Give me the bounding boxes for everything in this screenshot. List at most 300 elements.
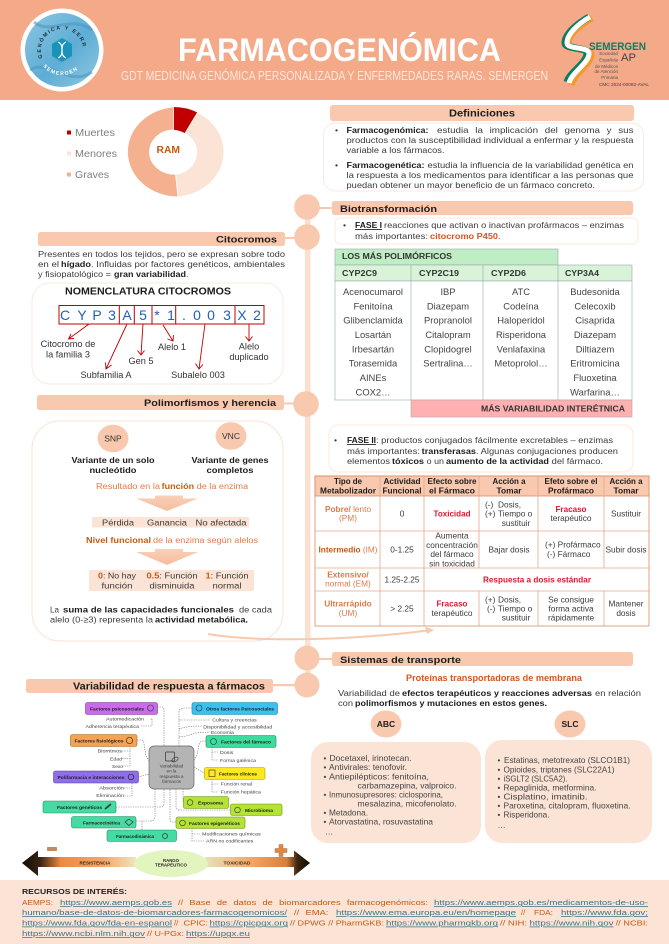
arrow: rango terapéutico: RESISTENCIA [80,860,110,866]
node: factores del fármaco [206,736,276,748]
footer: recursos de interés: https://www.ncbi.nlm.nih.gov [22,929,145,938]
footer: recursos de interés: https://www.pharmgkb.org [386,918,498,928]
panel: fase I: . [498,231,500,241]
panel: definiciones: variable a los fármacos. [346,145,444,155]
labels: otros factores: Disponibilidad y accesibilidad [203,724,273,730]
band: función: Ganancia [147,518,187,528]
table: CYP polimórficos: Metoprolol… [494,358,548,369]
node: otros factores psicosociales [192,702,278,714]
labels: psicosociales [86,717,145,729]
node: centro: respuesta a [159,774,184,779]
row: pobre [325,500,641,528]
table: CYP polimórficos: Glibenclamida [343,315,403,326]
row: pobre: sustituir [502,518,531,528]
arrow: rango terapéutico: RANGO [163,858,180,863]
row: ultrarrápido: (+) [485,594,496,604]
footer: recursos de interés: // U-PGx: [147,929,184,938]
labels: fisiológicos: Edad [110,756,122,761]
footer: recursos de interés: https://cpicpgx.org [210,918,288,928]
VNC: Variante de genes [192,455,269,465]
table head: el Fármaco [429,486,475,496]
table: CYP polimórficos: Codeína [503,300,540,311]
node: centro [149,746,194,789]
text: suma capacidades: alelo (0-≥3) representa la [50,614,153,624]
node: exposoma: Exposoma [198,800,223,806]
table: CYP polimórficos: Fenitoína [353,300,393,311]
SNP: SNP [104,434,122,444]
node: farmacodinámica: Farmacodinámica [116,834,154,839]
labels: polifarmacia [96,786,125,798]
node: factores genéticos: Factores genéticos [57,805,102,810]
panel: fase II: aumento de la actividad [446,456,549,466]
table: CYP polimórficos: AINEs [360,372,387,383]
text: suma capacidades: de cada [239,604,272,614]
node: farmacodinámica [107,830,176,842]
panel: SLC: • [498,792,500,801]
footer: recursos de interés: // Base de datos de biomarcadores farmacogenómicos: [178,898,428,907]
text: nivel funcional: Nivel funcional [86,535,151,545]
timeline line [305,207,310,687]
row: pobre: (-) [485,500,494,510]
icon: minus [47,847,57,851]
panel: ABC: • [324,763,326,772]
logo: genómica y EERR: GENÓMICA Y EERR [37,26,86,58]
legend: Graves [75,169,109,181]
logo: SEMERGEN AP: AP [621,52,636,64]
panel: SLC: iSGLT2 (SLC5A2). [504,774,568,783]
diagram: variabilidad en la respuesta [43,702,282,844]
nomenclature labels: Alelo 1 [158,342,186,352]
node: polifarmacia e interacciones [54,771,138,783]
panel: definiciones: la respuesta a los medicamentos para identificar a las personas que [346,170,634,180]
node: variabilidad de respuesta: Variabilidad de respuesta a fármacos [73,682,265,692]
footer: recursos de interés: // [174,918,179,928]
panel: SLC: Repaglinida, metformina. [504,783,596,792]
table: CYP polimórficos: Eritromicina [570,358,621,369]
table: CYP polimórficos: Irbesartán [352,343,394,354]
arrow: rango terapéutico: TERAPÉUTICO [155,862,188,868]
table: CYP polimórficos: Diazepam [574,329,616,340]
heading: proteínas transportadoras: Proteínas transportadoras de membrana [406,673,583,683]
panel: definiciones: • [335,160,338,170]
labels: epigenéticos [202,832,262,844]
arrow: polimorfismos to tabla [208,626,434,639]
text: variabilidad efectos: efectos terapéuticos y reacciones adversas [402,688,592,698]
text: citocromos intro: y fisiopatológico = [38,269,111,279]
panel: SLC: Risperidona. [504,811,550,820]
subtitle: GDT MEDICINA GENÓMICA PERSONALIZADA Y ENFERMEDADES RARAS. SEMERGEN [121,68,548,83]
row: intermedio: Bajar dosis [488,544,530,554]
footer: recursos de interés: https://www.ema.europa.eu/en/homepage [336,908,516,917]
panel: SLC: • [498,756,500,765]
band: niveles: 0.5: Función [146,570,198,580]
icon: plus [275,844,287,856]
nomenclature labels [41,339,269,380]
arrow: down 2 [136,549,198,565]
labels: polifarmacia: Absorción [99,786,125,790]
row: ultrarrápido: (UM) [339,608,357,618]
labels: fármaco [220,750,256,763]
band: función: No afectada [196,518,247,528]
node: citocromos [38,224,320,250]
node: polifarmacia e interacciones: Polifarmacia e interacciones [58,775,125,780]
footer: recursos de interés: https://www.fda.gov/fda-en-espanol [22,918,172,928]
row: intermedio: 0-1.25 [390,544,414,554]
band: niveles: normal [212,580,242,590]
panel: fase I: más importantes: [355,231,428,241]
text: citocromos intro: en el [38,259,59,269]
row: ultrarrápido: Tiempo o [498,603,533,613]
labels: epigenéticos: ARN no codificantes [206,838,254,844]
row: ultrarrápido: Dosis, [498,594,521,604]
text: citocromos intro: . [186,269,188,279]
footer: recursos de interés: AEMPS: [22,898,53,907]
labels: fisiológicos: Sexo [112,764,123,769]
circle: ABC [370,710,402,738]
heading: Definiciones: Definiciones [449,108,515,120]
labels: clínicos: Función renal [221,782,252,786]
footer: recursos de interés: // NIH: [500,918,527,928]
node: variabilidad de respuesta [26,672,320,698]
text: variabilidad efectos: Variabilidad de [338,688,400,698]
panel: ABC: Atorvastatina, rosuvastatina [329,817,433,826]
panel: SLC: • [498,774,500,783]
panel: fase II: • [334,435,337,445]
table head: Tomar [496,486,522,496]
node: factores psicosociales: Factores psicosociales [90,706,144,712]
table: CYP polimórficos: Venlafaxina [497,343,546,354]
donut chart: RAM [67,107,224,197]
node: factores del fármaco: Factores del fármaco [221,740,271,744]
band: niveles: disminuida [150,580,195,590]
table head: Tomar [614,486,639,496]
logo: SEMERGEN AP: CMC 2024-00082-AVAL [599,82,649,87]
node: factores epigenéticos [176,817,245,828]
footer: recursos de interés: FDA: [534,908,553,917]
table: CYP polimórficos: MÁS VARIABILIDAD INTERÉTNICA [481,404,625,414]
band: niveles: 0: No hay [98,570,137,580]
table: CYP polimórficos: IBP [440,286,456,297]
node: factores fisiológicos: Factores fisiológicos [74,738,124,744]
footer: recursos de interés: // DPWG // PharmGKB: [290,918,384,928]
text: citocromos intro: hígado [61,259,91,269]
row: extensivo: normal (EM) [325,579,371,589]
row: ultrarrápido: terapéutico [431,608,473,618]
logo: SEMERGEN AP: de Atención [594,69,618,74]
panel: definiciones [324,123,644,191]
donut chart: RAM: RAM [156,145,180,156]
circle: ABC: ABC [377,719,395,729]
panel: ABC: • [324,817,326,826]
row: ultrarrápido: dosis [616,608,636,618]
text: variabilidad efectos: en relación [595,688,641,698]
footer: recursos de interés: // [521,908,526,917]
logo: SEMERGEN AP: SEMERGEN [589,41,646,53]
panel: fase I: FASE I [355,220,382,230]
panel: ABC: … [325,828,333,837]
table: CYP polimórficos: Risperidona [496,329,547,340]
table: CYP polimórficos: Sertralina… [423,358,473,369]
table: CYP polimórficos: Haloperidol [497,315,545,326]
legend: Menores [75,148,117,160]
row: intermedio: (+) Profármaco [545,540,601,550]
panel: definiciones: • [335,125,338,135]
node: factores clínicos: Factores clínicos [219,772,257,776]
panel: definiciones: estudia la implicación del genoma y sus [437,125,634,135]
table: CYP polimórficos: Acenocumarol [343,286,403,297]
text: resultado: Resultado en la [96,481,160,491]
table: CYP polimórficos: Fluoxetina [573,372,617,383]
node: centro: fármacos [162,779,182,784]
table: tipo de metabolizador [315,476,649,626]
circle: SLC [554,710,586,738]
footer: recursos de interés: https://upgx.eu [186,929,250,938]
SNP: Variante de un solo [72,455,154,465]
logo: SEMERGEN AP: Española [599,58,618,62]
panel: SLC: Paroxetina, citalopram, fluoxetina. [504,802,630,811]
text: nivel funcional [86,535,258,545]
panel: fase II: . Algunas conjugaciones producen [476,446,618,456]
row: pobre: Tiempo o [498,508,533,518]
labels: epigenéticos: Modificaciones químicas [202,832,262,836]
row: ultrarrápido: > 2.25 [390,603,414,613]
footer: recursos de interés: // EMA: [294,908,328,917]
labels: psicosociales: Automedicación [106,717,145,722]
node: otros factores psicosociales: Otros factores Psicosociales [206,706,274,712]
table head: Metabolizador [320,486,377,496]
row: extensivo: Respuesta a dosis estándar [483,574,592,584]
band: niveles: 1: Función [206,570,249,580]
text: suma capacidades: actividad metabólica. [155,614,248,624]
node: sistemas de transporte [294,646,633,670]
row: intermedio: Aumenta [435,531,469,541]
node: polimorfismos y herencia [37,391,319,417]
panel: fase II: tóxicos [392,456,424,466]
footer: recursos de interés: https://www.fda.gov; [561,908,648,917]
text: resultado: de la enzima [197,481,248,491]
row: intermedio: concentración [426,540,478,550]
panel: SLC: • [498,811,500,820]
band: función [92,517,249,528]
panel: ABC: Inmunosupresores: ciclosporina, [329,791,443,800]
row: pobre: Toxicidad [434,508,470,518]
table head: Profármaco [548,486,594,496]
nomenclature labels: duplicado [229,352,269,362]
row: pobre: 0 [400,508,405,518]
footer: recursos de interés: https://www.aemps.gob.es [60,898,172,907]
panel: SLC: • [498,783,500,792]
title: FARMACOGENÓMICA [178,32,501,68]
table head: Efecto sobre [428,476,477,486]
arrow: rango terapéutico: TOXICIDAD [224,860,250,866]
table: CYP polimórficos: Diazepam [427,300,469,311]
panel: SLC: … [498,821,506,830]
row: ultrarrápido: Se consigue [548,594,594,604]
labels: psicosociales: Adherencia terapéutica [86,724,139,729]
header banner [0,0,669,100]
table: CYP polimórficos: LOS MÁS POLIMÓRFICOS [342,252,452,261]
panel: definiciones: Farmacogenética: [346,160,425,170]
text: suma capacidades [50,604,272,624]
footer: recursos de interés: humano/base-de-datos-de-biomarcadores-farmacogenomicos/ [22,908,288,917]
band: función: Pérdida [102,518,134,528]
band: niveles: función [102,580,133,590]
footer: recursos de interés: RECURSOS DE INTERÉS: [22,887,127,896]
node: microbioma [230,804,282,816]
row: pobre: Pobre/ lento [325,504,371,514]
panel: SLC: • [498,802,500,811]
connectors [116,707,230,841]
panel: SLC: Estatinas, metotrexato (SLCO1B1) [504,756,630,765]
table: CYP polimórficos: Torasemida [349,358,398,369]
nomenclature labels: Subfamilia A [80,370,132,380]
node: farmacocinética: Farmacocinética [83,820,120,826]
row: intermedio: del fármaco [430,549,474,559]
panel: fase II: más importantes: [347,446,420,456]
panel: fase I: • [343,220,346,230]
panel: polimorfismos [32,421,283,641]
table: CYP polimórficos: CYP2C9 [342,269,378,278]
text: suma capacidades: La [50,604,59,614]
table head: Funcional [382,486,422,496]
table: CYP polimórficos: Warfarina… [570,386,620,397]
panel: ABC: Docetaxel, irinotecan. [330,754,412,763]
row: extensivo [325,570,592,589]
row: pobre: (PM) [339,513,357,523]
footer: recursos de interés: https://www.nih.gov [530,918,614,928]
logo: SEMERGEN AP: de Médicos [595,64,619,69]
table: CYP polimórficos: Diltiazem [576,343,614,354]
logo: SEMERGEN AP: Primaria [601,75,618,80]
SNP: nucleótido [90,465,136,475]
panel: SLC: Cisplatino, imatinib. [504,792,588,801]
VNC: VNC [222,431,240,441]
VNC [192,422,269,475]
nomenclature labels: Alelo [239,342,259,352]
table head: Tipo de [334,476,362,486]
row: ultrarrápido: forma activa [548,603,594,613]
row: pobre: Sustituir [611,508,641,518]
table: CYP polimórficos: ATC [512,286,530,297]
panel: ABC: • [324,772,326,781]
panel: nomenclatura citocromos [32,283,283,384]
row: intermedio [318,531,647,568]
footer: recursos de interés [0,880,669,944]
nomenclature labels: Subalelo 003 [171,370,225,380]
row: intermedio: sin toxicidad [429,558,475,568]
labels: fisiológicos [98,749,123,769]
legend [67,127,117,181]
node: centro: en la [167,769,177,774]
panel: fase II: transferasas [422,446,476,456]
row: ultrarrápido: sustituir [502,612,531,622]
node: exposoma [184,796,228,808]
row: ultrarrápido: (-) [487,603,496,613]
node: factores fisiológicos [70,734,137,746]
panel: ABC: Metadona. [329,808,368,817]
footer: recursos de interés: https://www.aemps.gob.es/medicamentos-de-uso- [434,898,649,907]
heading: Definiciones [330,105,634,121]
row: ultrarrápido: Fracaso [436,599,468,609]
nomenclature labels: Gen 5 [128,356,154,366]
panel: fase I [335,218,638,244]
panel: ABC: • [324,754,326,763]
panel: fase II: : productos conjugados fácilmente excretables – enzimas [376,435,613,445]
text: citocromos intro: gran variabilidad [114,269,186,279]
row: ultrarrápido: Mantener [608,599,644,609]
table: CYP polimórficos: Clopidogrel [424,343,472,354]
table: CYP polimórficos: COX2… [356,386,390,397]
panel: SLC: • [498,765,500,774]
row: pobre: Dosis, [498,500,521,510]
node: factores epigenéticos: Factores epigenéticos [189,821,240,826]
table head: Acción a [492,476,526,486]
panel: ABC [311,742,481,843]
panel: ABC: mesalazina, micofenolato. [358,800,456,809]
labels: fisiológicos: Biorritmos [98,749,123,754]
logo: genómica y EERR: SEMERGEN [44,64,78,76]
table: CYP polimórficos: Celecoxib [574,300,616,311]
table: CYP polimórficos: Losartán [355,329,391,340]
text: citocromos intro [38,249,285,279]
labels: clínicos [221,782,261,794]
table head: Acción a [610,476,643,486]
node: biotransformación: Biotransformación [340,204,437,215]
panel: fase II [329,425,633,472]
footer: recursos de interés: // NCBI: [616,918,648,928]
text: resultado: función [162,481,194,491]
text: citocromos intro: Presentes en todos los tejidos, pero se expresan sobre todo [38,249,285,259]
labels: otros factores: Economía [211,730,234,735]
text: variabilidad efectos [338,688,641,708]
row: pobre: (+) [485,508,496,518]
node: factores clínicos [204,768,265,780]
row: intermedio: Subir dosis [605,544,647,554]
panel: ABC: Antivirales: tenofovir. [329,763,407,772]
node: centro: Variabilidad [160,764,184,768]
text: resultado [96,481,248,491]
node: citocromos: Citocromos [216,234,277,246]
logo: genómica y EERR [20,8,104,92]
labels: polifarmacia: Eliminación [96,793,125,798]
logo: SEMERGEN AP: Sociedad [599,51,618,56]
nomenclature labels: Citocromo de [41,339,95,349]
row: pobre: terapéutico [550,513,592,523]
red arrows [68,324,252,369]
circle: SLC: SLC [562,719,578,729]
text: citocromos intro: . Influidas por factores genéticos, ambientales [91,259,285,269]
table: CYP polimórficos: CYP2C19 [419,269,460,278]
panel: definiciones: Farmacogenómica: [346,125,429,135]
panel: definiciones: puedan obtener un mayor beneficio de un fármaco concreto. [346,180,595,190]
table: CYP polimórficos: Propranolol [424,315,472,326]
band: niveles [89,570,254,591]
row: ultrarrápido [324,594,644,622]
row: pobre: Fracaso [556,504,586,514]
panel: SLC [485,740,652,843]
VNC: completos [206,465,254,475]
labels: fármaco: Forma galénica [220,758,256,763]
panel: fase II: del fármaco. [552,456,603,466]
text: variabilidad efectos: polimorfismos y mutaciones en estos genes. [355,698,547,708]
panel: ABC: • [324,791,326,800]
node: polimorfismos y herencia: Polimorfismos y herencia [144,398,277,409]
node: factores genéticos [43,801,116,813]
SNP [72,425,154,475]
node: sistemas de transporte: Sistemas de transporte [340,655,461,666]
row: ultrarrápido: Ultrarrápido [324,599,372,609]
row: extensivo: 1.25-2.25 [384,574,420,584]
